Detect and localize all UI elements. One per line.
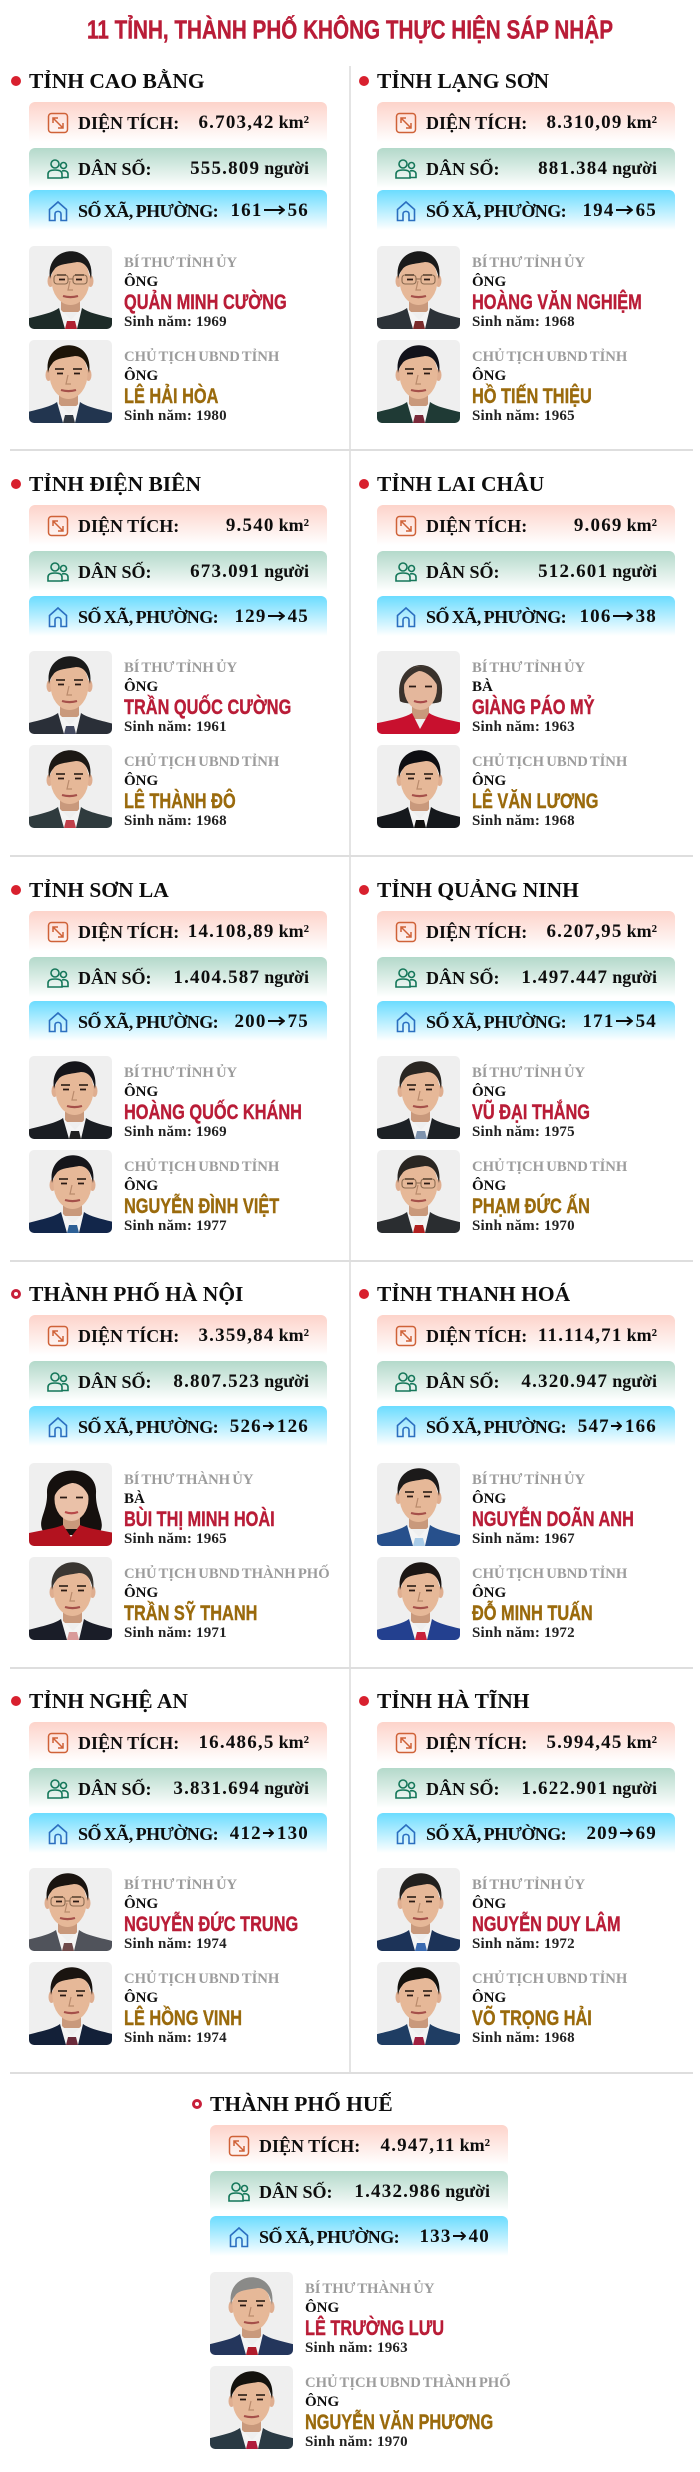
person: party secretary: ÔNG xyxy=(472,1896,506,1912)
communes row: 129 xyxy=(234,606,267,626)
area row xyxy=(29,102,327,142)
person: chairman: CHỦ TỊCH UBND TỈNH xyxy=(124,1159,279,1175)
portrait xyxy=(29,745,112,828)
population row: DÂN SỐ: xyxy=(78,562,152,582)
bullet ring xyxy=(192,2099,202,2109)
portrait xyxy=(29,1962,112,2045)
person: chairman xyxy=(29,745,280,829)
communes row: SỐ XÃ, PHƯỜNG: xyxy=(426,1417,566,1437)
person: chairman xyxy=(377,1557,628,1641)
area row xyxy=(29,505,327,545)
portrait xyxy=(29,340,112,423)
person: chairman: ÔNG xyxy=(305,2394,339,2410)
communes row: SỐ XÃ, PHƯỜNG: xyxy=(426,607,566,627)
communes row: 56 xyxy=(288,200,309,220)
panel: Tỉnh Cao Bằng xyxy=(11,69,327,424)
communes row: 54 xyxy=(636,1010,657,1032)
person: chairman: CHỦ TỊCH UBND TỈNH xyxy=(124,349,279,365)
area row: DIỆN TÍCH: xyxy=(78,113,179,133)
area row xyxy=(377,102,675,142)
area row: 6.703,42 xyxy=(198,112,275,132)
population row: DÂN SỐ: xyxy=(78,968,152,988)
population row xyxy=(377,1361,675,1401)
communes row: SỐ XÃ, PHƯỜNG: xyxy=(78,607,218,627)
person: chairman: Sinh năm: 1968 xyxy=(124,813,227,829)
person: chairman: ÔNG xyxy=(124,1585,158,1601)
person: party secretary: Sinh năm: 1965 xyxy=(124,1531,227,1547)
population row: 4.320.947 xyxy=(521,1370,608,1392)
communes row: SỐ XÃ, PHƯỜNG: xyxy=(78,1012,218,1032)
portrait xyxy=(29,651,112,734)
population row: 1.497.447 xyxy=(521,966,608,988)
bullet xyxy=(359,1696,369,1706)
person: party secretary: BÍ THƯ TỈNH ỦY xyxy=(472,1877,585,1893)
population row: 1.404.587 xyxy=(173,966,260,988)
communes row: 45 xyxy=(288,606,309,626)
population row: người xyxy=(612,158,657,178)
person: chairman: Sinh năm: 1971 xyxy=(124,1625,227,1641)
person: chairman: ÔNG xyxy=(124,773,158,789)
area row: 16.486,5 xyxy=(198,1732,275,1752)
communes row: 161 xyxy=(230,200,263,220)
area row: km² xyxy=(627,1732,657,1752)
communes row xyxy=(377,1001,675,1041)
panel: Tỉnh Lạng Sơn xyxy=(359,69,675,424)
person: party secretary xyxy=(377,246,642,330)
area row: km² xyxy=(279,1324,309,1344)
communes row: SỐ XÃ, PHƯỜNG: xyxy=(78,1824,218,1844)
population row: người xyxy=(264,1370,309,1390)
person: chairman: Sinh năm: 1970 xyxy=(472,1218,575,1234)
communes row xyxy=(210,2216,508,2256)
communes row: 526 xyxy=(230,1416,262,1436)
communes row xyxy=(377,596,675,636)
person: party secretary: BÍ THƯ TỈNH ỦY xyxy=(472,1065,585,1081)
communes row: 209 xyxy=(586,1822,619,1844)
person: party secretary: BÍ THƯ TỈNH ỦY xyxy=(472,1472,585,1488)
person: party secretary: BÀ xyxy=(124,1491,145,1507)
population row: 881.384 xyxy=(538,158,608,178)
area row: 9.069 xyxy=(574,514,623,536)
panel: Thành phố Huế xyxy=(192,2092,511,2450)
population row: DÂN SỐ: xyxy=(426,1779,500,1799)
portrait xyxy=(377,1150,460,1233)
person: party secretary: ÔNG xyxy=(472,1084,506,1100)
person: chairman xyxy=(29,1557,330,1641)
name: TRẦN SỸ THANH xyxy=(124,1601,257,1625)
person: party secretary: ÔNG xyxy=(124,274,158,290)
name: QUẢN MINH CƯỜNG xyxy=(124,290,287,314)
communes row xyxy=(29,596,327,636)
name: VÕ TRỌNG HẢI xyxy=(472,2006,592,2030)
name: GIÀNG PÁO MỶ xyxy=(472,695,595,719)
population row: DÂN SỐ: xyxy=(78,1779,152,1799)
area row: DIỆN TÍCH: xyxy=(259,2136,360,2156)
portrait xyxy=(29,1557,112,1640)
area row: DIỆN TÍCH: xyxy=(78,922,179,942)
communes row xyxy=(377,1406,675,1446)
panel: Tỉnh Sơn La xyxy=(11,878,327,1234)
population row: người xyxy=(264,560,309,580)
area row xyxy=(377,1722,675,1762)
bullet xyxy=(359,76,369,86)
person: party secretary: ÔNG xyxy=(124,1084,158,1100)
person: party secretary: Sinh năm: 1969 xyxy=(124,314,227,330)
person: chairman: Sinh năm: 1968 xyxy=(472,2030,575,2046)
person: party secretary: Sinh năm: 1963 xyxy=(305,2340,408,2356)
area row: 11.114,71 xyxy=(538,1324,623,1346)
name: LÊ THÀNH ĐÔ xyxy=(124,789,236,813)
communes row: 171 xyxy=(582,1010,615,1032)
person: party secretary: BÍ THƯ THÀNH ỦY xyxy=(305,2281,434,2297)
population row xyxy=(29,1768,327,1808)
name: NGUYỄN DUY LÂM xyxy=(472,1912,621,1936)
population row: người xyxy=(264,1778,309,1798)
communes row: 133 xyxy=(419,2226,452,2246)
population row: DÂN SỐ: xyxy=(78,1372,152,1392)
person: chairman xyxy=(29,340,280,424)
heading: TỈNH SƠN LA xyxy=(29,878,169,902)
area row: 14.108,89 xyxy=(188,920,275,942)
person: party secretary xyxy=(29,1868,298,1952)
area row xyxy=(29,1315,327,1355)
person: chairman: Sinh năm: 1965 xyxy=(472,408,575,424)
communes row xyxy=(377,190,675,230)
portrait xyxy=(210,2366,293,2449)
area row xyxy=(377,911,675,951)
panel: Tỉnh Nghệ An xyxy=(11,1689,327,2046)
person: chairman: CHỦ TỊCH UBND THÀNH PHỐ xyxy=(305,2375,511,2391)
person: party secretary: Sinh năm: 1975 xyxy=(472,1124,575,1140)
portrait xyxy=(29,1868,112,1951)
person: chairman: CHỦ TỊCH UBND TỈNH xyxy=(124,1971,279,1987)
portrait xyxy=(29,246,112,329)
area row: DIỆN TÍCH: xyxy=(78,516,179,536)
area row: DIỆN TÍCH: xyxy=(426,1733,527,1753)
population row xyxy=(377,1768,675,1808)
population row xyxy=(29,1361,327,1401)
person: chairman: Sinh năm: 1974 xyxy=(124,2030,227,2046)
name: ĐỖ MINH TUẤN xyxy=(472,1601,593,1625)
person: party secretary: BÍ THƯ TỈNH ỦY xyxy=(124,255,237,271)
panel: Thành phố Hà Nội xyxy=(11,1282,330,1641)
heading: TỈNH LẠNG SƠN xyxy=(377,69,549,93)
area row xyxy=(210,2125,508,2165)
panel: Tỉnh Hà Tĩnh xyxy=(359,1689,675,2046)
bullet xyxy=(11,76,21,86)
area row: km² xyxy=(279,112,309,132)
population row: DÂN SỐ: xyxy=(426,159,500,179)
portrait xyxy=(29,1463,112,1546)
portrait xyxy=(377,745,460,828)
person: chairman: CHỦ TỊCH UBND TỈNH xyxy=(472,1971,627,1987)
person: chairman: CHỦ TỊCH UBND TỈNH xyxy=(472,349,627,365)
area row: km² xyxy=(627,1324,657,1344)
communes row: 65 xyxy=(636,200,657,220)
heading: TỈNH ĐIỆN BIÊN xyxy=(29,472,201,496)
population row: 512.601 xyxy=(538,560,608,582)
name: HỒ TIẾN THIỆU xyxy=(472,384,592,408)
population row: người xyxy=(612,560,657,580)
area row xyxy=(377,505,675,545)
population row: 1.432.986 xyxy=(354,2180,441,2202)
communes row: 126 xyxy=(277,1416,309,1436)
person: party secretary: BÍ THƯ THÀNH ỦY xyxy=(124,1472,253,1488)
panel: Tỉnh Lai Châu xyxy=(359,472,675,829)
bullet xyxy=(359,1289,369,1299)
name: HOÀNG VĂN NGHIỆM xyxy=(472,290,642,314)
person: party secretary: Sinh năm: 1963 xyxy=(472,719,575,735)
population row xyxy=(210,2171,508,2211)
person: chairman: ÔNG xyxy=(124,368,158,384)
person: chairman: CHỦ TỊCH UBND THÀNH PHỐ xyxy=(124,1566,330,1582)
area row: 9.540 xyxy=(226,514,275,536)
person: party secretary xyxy=(29,1056,302,1140)
person: chairman xyxy=(29,1962,280,2046)
population row: DÂN SỐ: xyxy=(426,1372,500,1392)
person: chairman: ÔNG xyxy=(472,368,506,384)
person: chairman: Sinh năm: 1970 xyxy=(305,2434,408,2450)
person: party secretary: Sinh năm: 1961 xyxy=(124,719,227,735)
area row: km² xyxy=(460,2134,490,2154)
person: party secretary: Sinh năm: 1972 xyxy=(472,1936,575,1952)
population row: người xyxy=(612,1778,657,1798)
heading: THÀNH PHỐ HUẾ xyxy=(210,2092,393,2116)
name: HOÀNG QUỐC KHÁNH xyxy=(124,1100,302,1124)
person: chairman: Sinh năm: 1972 xyxy=(472,1625,575,1641)
name: LÊ HỒNG VINH xyxy=(124,2006,242,2030)
communes row: SỐ XÃ, PHƯỜNG: xyxy=(426,201,566,221)
population row: 673.091 xyxy=(190,560,260,582)
area row: 8.310,09 xyxy=(546,112,623,132)
person: party secretary: ÔNG xyxy=(472,274,506,290)
person: party secretary xyxy=(29,246,287,330)
area row: km² xyxy=(627,920,657,940)
population row xyxy=(377,957,675,997)
area row: 4.947,11 xyxy=(381,2134,456,2156)
person: chairman: ÔNG xyxy=(472,1585,506,1601)
person: party secretary: BÍ THƯ TỈNH ỦY xyxy=(472,255,585,271)
heading: TỈNH QUẢNG NINH xyxy=(377,878,579,902)
name: PHẠM ĐỨC ẤN xyxy=(472,1194,590,1218)
person: chairman: Sinh năm: 1977 xyxy=(124,1218,227,1234)
bullet xyxy=(359,479,369,489)
heading: TỈNH HÀ TĨNH xyxy=(377,1689,530,1713)
person: chairman xyxy=(377,745,628,829)
person: party secretary: BÍ THƯ TỈNH ỦY xyxy=(124,1065,237,1081)
area row: DIỆN TÍCH: xyxy=(426,113,527,133)
person: party secretary xyxy=(29,1463,275,1547)
person: chairman xyxy=(377,1962,628,2046)
bullet xyxy=(11,479,21,489)
person: party secretary: BÀ xyxy=(472,679,493,695)
person: party secretary: ÔNG xyxy=(124,1896,158,1912)
communes row: 412 xyxy=(230,1822,262,1844)
person: party secretary xyxy=(210,2272,444,2356)
person: chairman: ÔNG xyxy=(472,773,506,789)
portrait xyxy=(377,651,460,734)
person: party secretary xyxy=(377,651,595,735)
communes row: 38 xyxy=(636,606,657,626)
person: chairman: CHỦ TỊCH UBND TỈNH xyxy=(472,1159,627,1175)
population row: 1.622.901 xyxy=(521,1778,608,1798)
population row xyxy=(29,148,327,188)
communes row: 40 xyxy=(469,2226,490,2246)
heading: THÀNH PHỐ HÀ NỘI xyxy=(29,1282,243,1306)
heading: TỈNH NGHỆ AN xyxy=(29,1689,188,1713)
area row: km² xyxy=(627,514,657,534)
area row xyxy=(29,1722,327,1762)
bullet xyxy=(11,885,21,895)
portrait xyxy=(377,1056,460,1139)
communes row xyxy=(377,1813,675,1853)
population row xyxy=(29,551,327,591)
area row: 6.207,95 xyxy=(546,920,623,942)
population row xyxy=(29,957,327,997)
portrait xyxy=(377,1962,460,2045)
name: BÙI THỊ MINH HOÀI xyxy=(124,1507,275,1531)
person: party secretary: BÍ THƯ TỈNH ỦY xyxy=(124,660,237,676)
population row: DÂN SỐ: xyxy=(426,562,500,582)
portrait xyxy=(29,1056,112,1139)
communes row: 166 xyxy=(625,1416,657,1436)
person: party secretary xyxy=(377,1056,590,1140)
communes row xyxy=(29,1813,327,1853)
name: LÊ TRƯỜNG LƯU xyxy=(305,2316,444,2340)
communes row: 200 xyxy=(234,1010,267,1032)
area row xyxy=(29,911,327,951)
name: NGUYỄN ĐÌNH VIỆT xyxy=(124,1194,279,1218)
population row: DÂN SỐ: xyxy=(426,968,500,988)
person: chairman: CHỦ TỊCH UBND TỈNH xyxy=(124,754,279,770)
person: party secretary: BÍ THƯ TỈNH ỦY xyxy=(472,660,585,676)
person: party secretary: Sinh năm: 1968 xyxy=(472,314,575,330)
person: party secretary xyxy=(29,651,291,735)
person: party secretary xyxy=(377,1868,621,1952)
panel: Tỉnh Thanh Hoá xyxy=(359,1282,675,1641)
name: NGUYỄN DOÃN ANH xyxy=(472,1507,634,1531)
communes row: 547 xyxy=(578,1416,610,1436)
person: chairman: ÔNG xyxy=(124,1178,158,1194)
person: party secretary: ÔNG xyxy=(124,679,158,695)
communes row: SỐ XÃ, PHƯỜNG: xyxy=(426,1824,566,1844)
bullet xyxy=(11,1696,21,1706)
communes row: 75 xyxy=(288,1010,309,1032)
person: party secretary: Sinh năm: 1974 xyxy=(124,1936,227,1952)
person: party secretary: Sinh năm: 1969 xyxy=(124,1124,227,1140)
communes row: 69 xyxy=(636,1822,657,1844)
population row: DÂN SỐ: xyxy=(259,2182,333,2202)
person: chairman: Sinh năm: 1980 xyxy=(124,408,227,424)
person: chairman: CHỦ TỊCH UBND TỈNH xyxy=(472,1566,627,1582)
communes row xyxy=(29,1406,327,1446)
communes row: SỐ XÃ, PHƯỜNG: xyxy=(78,201,218,221)
population row: người xyxy=(445,2180,490,2200)
area row: km² xyxy=(279,1732,309,1752)
communes row: 106 xyxy=(579,606,612,626)
heading: TỈNH CAO BẰNG xyxy=(29,69,205,93)
portrait xyxy=(377,340,460,423)
person: chairman: ÔNG xyxy=(472,1178,506,1194)
area row: DIỆN TÍCH: xyxy=(78,1326,179,1346)
area row: 3.359,84 xyxy=(198,1324,275,1346)
area row: DIỆN TÍCH: xyxy=(426,516,527,536)
person: party secretary: ÔNG xyxy=(472,1491,506,1507)
population row: DÂN SỐ: xyxy=(78,159,152,179)
person: chairman xyxy=(377,1150,628,1234)
area row: DIỆN TÍCH: xyxy=(78,1733,179,1753)
bullet ring xyxy=(11,1289,21,1299)
name: NGUYỄN ĐỨC TRUNG xyxy=(124,1912,298,1936)
area row: km² xyxy=(627,112,657,132)
person: party secretary: BÍ THƯ TỈNH ỦY xyxy=(124,1877,237,1893)
heading: TỈNH LAI CHÂU xyxy=(377,472,544,496)
name: LÊ VĂN LƯƠNG xyxy=(472,789,598,813)
population row: người xyxy=(612,1370,657,1390)
population row: 8.807.523 xyxy=(173,1370,260,1392)
population row: người xyxy=(612,966,657,986)
communes row: 194 xyxy=(582,200,615,220)
person: party secretary: ÔNG xyxy=(305,2300,339,2316)
name: LÊ HẢI HÒA xyxy=(124,384,218,408)
communes row xyxy=(29,190,327,230)
population row: 555.809 xyxy=(190,158,260,178)
area row: km² xyxy=(279,514,309,534)
population row: người xyxy=(264,966,309,986)
person: chairman: Sinh năm: 1968 xyxy=(472,813,575,829)
portrait xyxy=(377,1868,460,1951)
panel: Tỉnh Quảng Ninh xyxy=(359,878,675,1234)
person: chairman: ÔNG xyxy=(472,1990,506,2006)
person: chairman: ÔNG xyxy=(124,1990,158,2006)
person: party secretary: Sinh năm: 1967 xyxy=(472,1531,575,1547)
portrait xyxy=(29,1150,112,1233)
communes row: SỐ XÃ, PHƯỜNG: xyxy=(426,1012,566,1032)
person: chairman xyxy=(377,340,628,424)
communes row: SỐ XÃ, PHƯỜNG: xyxy=(259,2227,399,2247)
area row: 5.994,45 xyxy=(546,1732,623,1752)
area row xyxy=(377,1315,675,1355)
name: TRẦN QUỐC CƯỜNG xyxy=(124,695,291,719)
name: NGUYỄN VĂN PHƯƠNG xyxy=(305,2410,493,2434)
portrait xyxy=(377,1557,460,1640)
population row xyxy=(377,551,675,591)
communes row xyxy=(29,1001,327,1041)
portrait xyxy=(377,1463,460,1546)
person: party secretary xyxy=(377,1463,634,1547)
communes row: SỐ XÃ, PHƯỜNG: xyxy=(78,1417,218,1437)
area row: km² xyxy=(279,920,309,940)
name: VŨ ĐẠI THẮNG xyxy=(472,1100,590,1124)
person: chairman xyxy=(29,1150,280,1234)
heading: TỈNH THANH HOÁ xyxy=(377,1282,570,1306)
panel: Tỉnh Điện Biên xyxy=(11,472,327,829)
person: chairman xyxy=(210,2366,511,2450)
population row: người xyxy=(264,158,309,178)
portrait xyxy=(210,2272,293,2355)
portrait xyxy=(377,246,460,329)
area row: DIỆN TÍCH: xyxy=(426,1326,527,1346)
population row: 3.831.694 xyxy=(173,1778,260,1798)
bullet xyxy=(359,885,369,895)
population row xyxy=(377,148,675,188)
communes row: 130 xyxy=(277,1822,309,1844)
person: chairman: CHỦ TỊCH UBND TỈNH xyxy=(472,754,627,770)
area row: DIỆN TÍCH: xyxy=(426,922,527,942)
